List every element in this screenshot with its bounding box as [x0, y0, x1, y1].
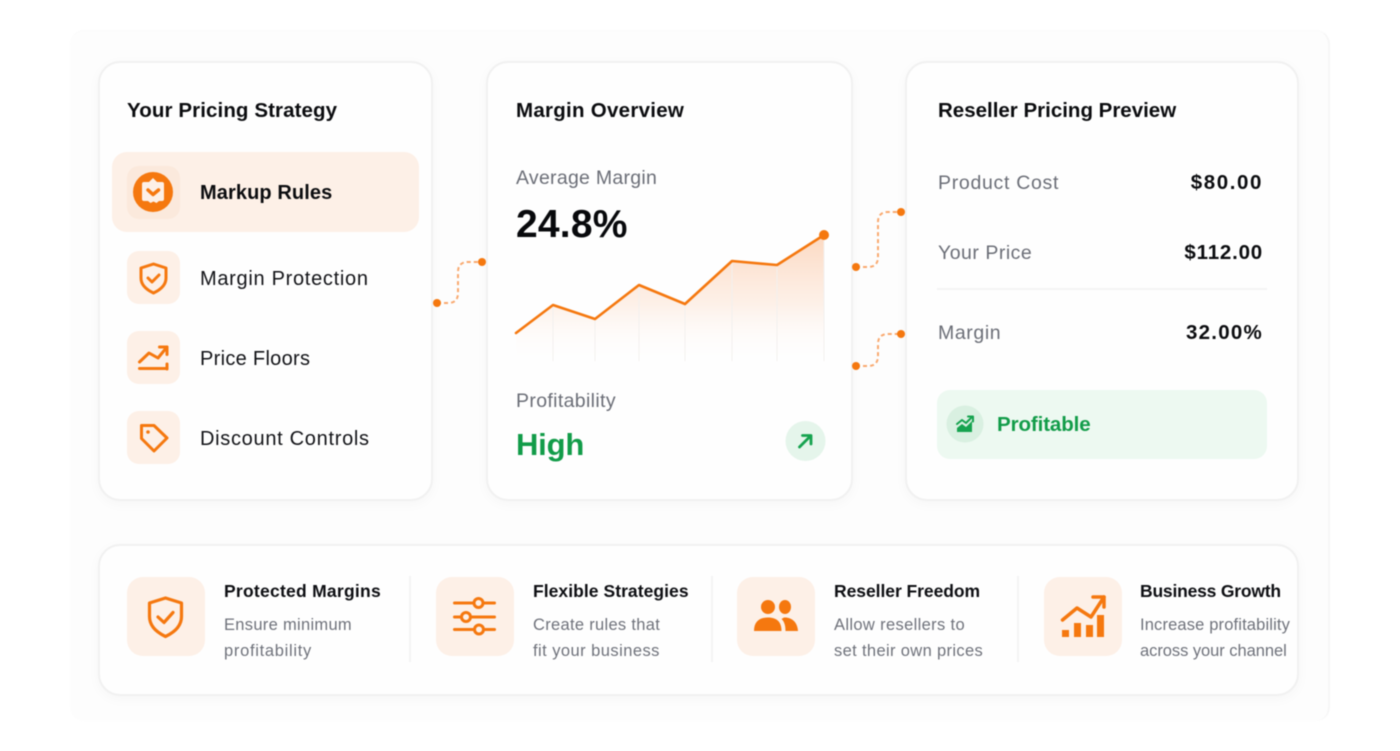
label: discount controls: Discount Controls	[200, 428, 370, 450]
icon: reseller freedom people	[737, 577, 815, 656]
benefit text: protected margins: Ensure minimum	[224, 616, 352, 634]
benefit text: reseller freedom: Allow resellers to	[834, 616, 965, 634]
panel: benefits strip	[98, 544, 1299, 696]
panel: your pricing strategy	[98, 61, 433, 501]
value: high: High	[516, 427, 584, 462]
icon: protected margins shield	[127, 577, 205, 656]
benefit text: business growth: across your channel	[1140, 642, 1287, 660]
benefit text: flexible strategies	[532, 616, 660, 660]
markup rules highlighted row	[112, 152, 419, 232]
heading: your pricing strategy: Your Pricing Strategy	[127, 99, 337, 122]
benefit text: business growth: Increase profitability	[1140, 616, 1290, 634]
benefit heading: reseller freedom: Reseller Freedom	[834, 581, 980, 601]
label: markup rules: Markup Rules	[200, 182, 332, 204]
benefit text: protected margins	[224, 616, 352, 660]
label: profitable: Profitable	[997, 413, 1091, 436]
label: your price: Your Price	[938, 242, 1032, 264]
icon: business growth chart	[1044, 577, 1122, 656]
benefit heading: business growth: Business Growth	[1140, 581, 1281, 601]
benefit text: business growth	[1140, 616, 1290, 660]
icon: flexible strategies sliders	[436, 577, 514, 656]
icon: discount tag	[127, 411, 180, 464]
benefit heading: flexible strategies: Flexible Strategies	[533, 581, 689, 601]
line chart	[514, 229, 830, 360]
benefit text: flexible strategies: Create rules that	[533, 616, 660, 634]
icon: trend up arrow	[786, 421, 826, 461]
icon: margin protection shield	[127, 251, 180, 304]
benefit text: flexible strategies: fit your business	[533, 642, 660, 660]
label: margin protection: Margin Protection	[200, 268, 369, 290]
connector: margin to margin value	[851, 329, 906, 371]
icon: price floors chart	[127, 331, 180, 384]
value: average margin: 24.8%	[516, 203, 628, 246]
heading: margin overview: Margin Overview	[516, 99, 684, 122]
value: your price: $112.00	[1184, 241, 1263, 264]
benefit text: reseller freedom	[834, 616, 983, 660]
icon: profitable chart	[946, 406, 984, 442]
benefit text: protected margins: profitability	[224, 642, 312, 660]
callout: profitable status	[937, 390, 1267, 459]
value: product cost: $80.00	[1191, 171, 1263, 194]
label: profitability: Profitability	[516, 390, 616, 412]
label: price floors: Price Floors	[200, 348, 310, 370]
panel: reseller pricing preview	[905, 61, 1299, 501]
heading: reseller pricing preview: Reseller Pricing Preview	[938, 99, 1176, 122]
value: margin: 32.00%	[1186, 321, 1263, 344]
panel: margin overview	[486, 61, 853, 501]
connector: strategy to margin	[432, 257, 487, 308]
label: average margin: Average Margin	[516, 167, 657, 189]
icon: markup rules badge	[127, 166, 180, 219]
label: product cost: Product Cost	[938, 172, 1059, 194]
benefit heading: protected margins: Protected Margins	[224, 581, 381, 601]
label: margin: Margin	[938, 322, 1001, 344]
connector: margin to your price	[851, 207, 906, 272]
benefit text: reseller freedom: set their own prices	[834, 642, 983, 660]
